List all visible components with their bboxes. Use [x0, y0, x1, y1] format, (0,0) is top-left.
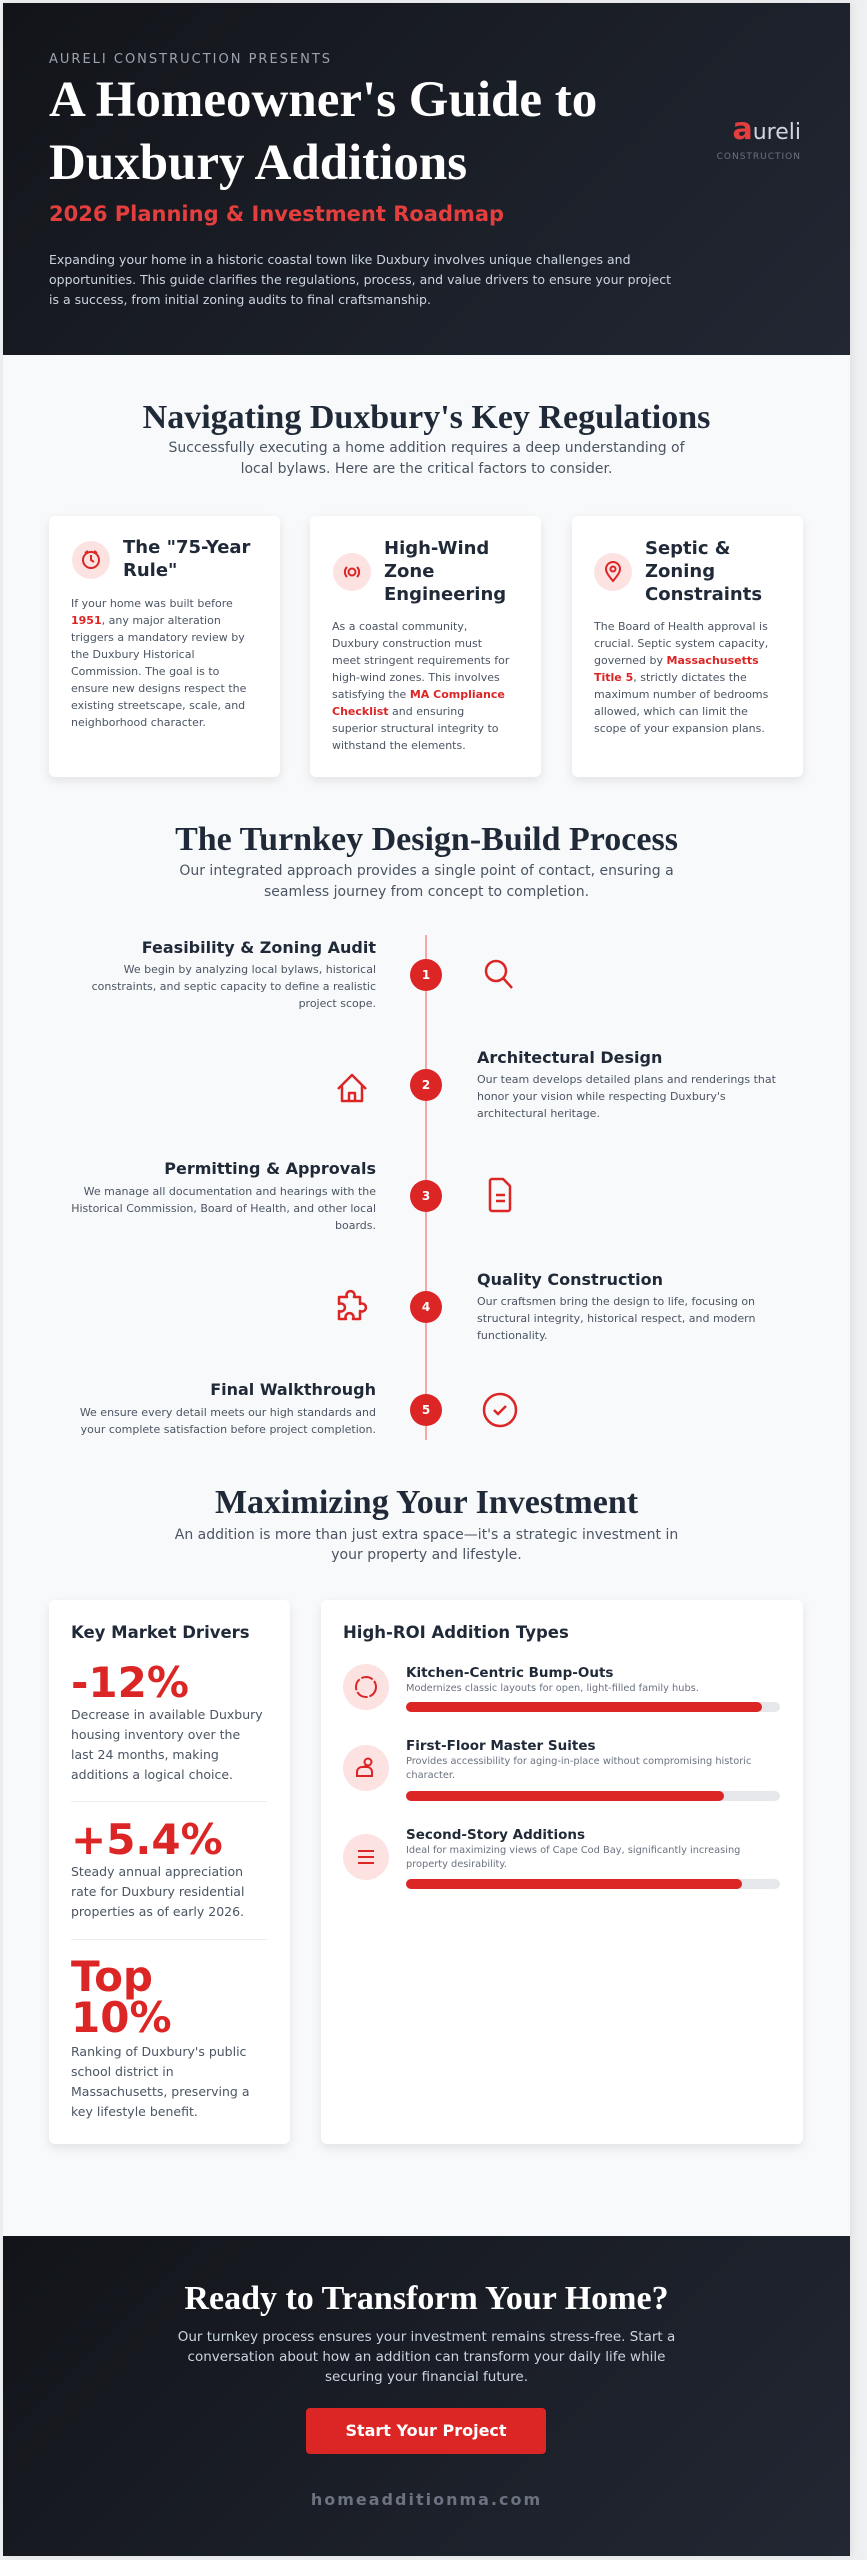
section heading: investment: Maximizing Your Investment: [215, 1484, 638, 1521]
panel title: Key Market Drivers: [71, 1623, 250, 1642]
section heading: process: The Turnkey Design-Build Process: [175, 821, 678, 858]
section heading: investment: your property and lifestyle.: [331, 1547, 522, 1563]
card body: Duxbury construction must: [332, 637, 482, 650]
intro paragraph: [49, 252, 671, 307]
stat: top 10%: Ranking of Duxbury's public: [71, 2044, 246, 2059]
card body: 1951, any major alteration: [71, 614, 221, 627]
step 2: 2: [422, 1078, 430, 1092]
cta text: conversation about how an addition can transform your daily life while: [188, 2349, 665, 2365]
stat: +5.4%: +5.4%: [71, 1815, 223, 1864]
logo: [717, 112, 801, 162]
roi item: master suites: [343, 1738, 780, 1801]
intro paragraph: opportunities. This guide clarifies the regulations, process, and value drivers to ensure your project: [49, 272, 671, 287]
section heading: regulations: [143, 399, 710, 477]
section heading: investment: [174, 1484, 678, 1563]
card body: [71, 597, 246, 729]
card body: ensure new designs respect the: [71, 682, 246, 695]
step 4: [338, 1270, 755, 1342]
card title: Zoning: [645, 561, 715, 582]
step 4: 4: [422, 1300, 430, 1314]
roi item: second-story: property desirability.: [406, 1859, 507, 1870]
step 2: architectural heritage.: [477, 1107, 600, 1120]
card body: withstand the elements.: [332, 739, 466, 752]
step 2: Our team develops detailed plans and renderings that: [477, 1073, 776, 1086]
step 5: [80, 1380, 518, 1436]
card body: governed by Massachusetts: [594, 654, 759, 667]
stat: -12%: housing inventory over the: [71, 1727, 240, 1742]
card body: maximum number of bedrooms: [594, 688, 768, 701]
stat: top 10%: Massachusetts, preserving a: [71, 2084, 250, 2099]
roi item: kitchen: [343, 1664, 780, 1712]
timeline: [71, 935, 776, 1440]
roi item: second-story: Second-Story Additions: [406, 1827, 585, 1843]
header: [3, 3, 850, 355]
card title: [384, 538, 506, 605]
card body: As a coastal community,: [332, 620, 467, 633]
intro paragraph: is a success, from initial zoning audits to final craftsmanship.: [49, 292, 431, 307]
card body: existing streetscape, scale, and: [71, 699, 245, 712]
section heading: process: Our integrated approach provides a single point of contact, ensuring a: [179, 863, 674, 879]
step 1: project scope.: [299, 997, 376, 1010]
stat: +5.4%: [71, 1815, 244, 1919]
step 1: constraints, and septic capacity to define a realistic: [92, 980, 376, 993]
cta text: Our turnkey process ensures your investment remains stress-free. Start a: [178, 2329, 675, 2345]
step 3: 3: [422, 1189, 430, 1203]
card body: scope of your expansion plans.: [594, 722, 765, 735]
step 4: Our craftsmen bring the design to life, focusing on: [477, 1295, 755, 1308]
card title: High-Wind: [384, 538, 489, 559]
step 4: structural integrity, historical respect, and modern: [477, 1312, 755, 1325]
stat: -12%: additions a logical choice.: [71, 1767, 233, 1782]
stat: top 10%: Top: [71, 1952, 153, 2001]
section heading: process: seamless journey from concept to completion.: [264, 884, 589, 900]
card body: The Board of Health approval is: [594, 620, 768, 633]
roi item: kitchen: Kitchen-Centric Bump-Outs: [406, 1665, 613, 1681]
card body: satisfying the MA Compliance: [332, 688, 505, 701]
cta button: [306, 2408, 546, 2454]
logo: aureli: [732, 112, 801, 147]
stat: -12%: [71, 1658, 263, 1782]
cta button: Start Your Project: [345, 2421, 507, 2440]
card title: [645, 538, 762, 605]
subtitle: 2026 Planning & Investment Roadmap: [49, 202, 504, 226]
roi item: master suites: character.: [406, 1770, 455, 1781]
step 2: Architectural Design: [477, 1048, 662, 1067]
stat: -12%: -12%: [71, 1658, 189, 1707]
card title: The "75-Year: [123, 537, 250, 558]
card body: superior structural integrity to: [332, 722, 498, 735]
section heading: regulations: Successfully executing a home addition requires a deep understanding of: [168, 440, 685, 456]
roi item: master suites: Provides accessibility for aging-in-place without compromising historic: [406, 1756, 751, 1767]
card body: Checklist and ensuring: [332, 705, 464, 718]
card title: Engineering: [384, 584, 506, 605]
stat: +5.4%: rate for Duxbury residential: [71, 1884, 244, 1899]
footer CTA: [3, 2236, 850, 2556]
stat: +5.4%: properties as of early 2026.: [71, 1904, 244, 1919]
panel: key market drivers: [49, 1600, 290, 2144]
section heading: regulations: local bylaws. Here are the critical factors to consider.: [241, 461, 612, 477]
card body: the Duxbury Historical: [71, 648, 195, 661]
intro paragraph: Expanding your home in a historic coastal town like Duxbury involves unique challenges and: [49, 252, 631, 267]
step 2: [337, 1048, 776, 1120]
icon: clock: [72, 541, 110, 579]
roi item: second-story: [343, 1827, 780, 1889]
card body: meet stringent requirements for: [332, 654, 509, 667]
card body: [594, 620, 768, 735]
step 1: Feasibility & Zoning Audit: [142, 938, 376, 957]
icon: wind signal: [333, 553, 371, 591]
panel: high-wind: [310, 516, 541, 777]
main title: Duxbury Additions: [49, 135, 467, 191]
section heading: investment: An addition is more than just extra space—it's a strategic investment in: [175, 1527, 678, 1543]
card body: Commission. The goal is to: [71, 665, 219, 678]
section heading: process: [175, 821, 678, 900]
card body: neighborhood character.: [71, 716, 206, 729]
card title: Zone: [384, 561, 434, 582]
stat: top 10%: [71, 1952, 250, 2119]
icon: location pin: [594, 553, 632, 591]
card body: [332, 620, 510, 752]
stat: top 10%: school district in: [71, 2064, 174, 2079]
cta heading: Ready to Transform Your Home?: [184, 2280, 669, 2317]
card body: triggers a mandatory review by: [71, 631, 245, 644]
header kicker: AURELI CONSTRUCTION PRESENTS: [49, 52, 332, 67]
step 1: [92, 938, 513, 1010]
stat: top 10%: 10%: [71, 1993, 172, 2042]
card title: Constraints: [645, 584, 762, 605]
step 3: Permitting & Approvals: [164, 1159, 376, 1178]
stat: -12%: Decrease in available Duxbury: [71, 1707, 263, 1722]
cta text: [178, 2329, 675, 2385]
card body: allowed, which can limit the: [594, 705, 748, 718]
section heading: regulations: Navigating Duxbury's Key Regulations: [143, 399, 710, 436]
step 3: boards.: [335, 1219, 376, 1232]
step 1: 1: [422, 968, 430, 982]
step 5: your complete satisfaction before project completion.: [81, 1423, 376, 1436]
stat: top 10%: key lifestyle benefit.: [71, 2104, 198, 2119]
website: homeadditionma.com: [311, 2490, 542, 2509]
logo: CONSTRUCTION: [717, 152, 801, 162]
roi item: master suites: First-Floor Master Suites: [406, 1738, 596, 1754]
card body: Title 5, strictly dictates the: [594, 671, 747, 684]
card title: Rule": [123, 560, 177, 581]
main title: [49, 72, 597, 191]
main title: A Homeowner's Guide to: [49, 72, 597, 128]
stat: +5.4%: Steady annual appreciation: [71, 1864, 243, 1879]
timeline line: [425, 935, 427, 1440]
step 1: We begin by analyzing local bylaws, historical: [124, 963, 376, 976]
card title: Septic &: [645, 538, 730, 559]
card body: If your home was built before: [71, 597, 233, 610]
card body: crucial. Septic system capacity,: [594, 637, 768, 650]
step 5: 5: [422, 1403, 430, 1417]
step 3: Historical Commission, Board of Health, and other local: [71, 1202, 376, 1215]
step 5: Final Walkthrough: [210, 1380, 376, 1399]
step 5: We ensure every detail meets our high standards and: [80, 1406, 376, 1419]
roi item: second-story: Ideal for maximizing views of Cape Cod Bay, significantly increasing: [406, 1845, 740, 1856]
panel: high-roi addition types: [321, 1600, 803, 2144]
roi item: kitchen: Modernizes classic layouts for open, light-filled family hubs.: [406, 1683, 699, 1694]
stat: -12%: last 24 months, making: [71, 1747, 219, 1762]
panel title: High-ROI Addition Types: [343, 1623, 569, 1642]
panel: 75-year rule: [49, 516, 280, 777]
card title: [123, 537, 250, 581]
step 3: We manage all documentation and hearings with the: [84, 1185, 376, 1198]
step 4: functionality.: [477, 1329, 548, 1342]
step 4: Quality Construction: [477, 1270, 663, 1289]
step 2: honor your vision while respecting Duxbury's: [477, 1090, 726, 1103]
cta text: securing your financial future.: [325, 2369, 528, 2385]
card body: high-wind zones. This involves: [332, 671, 500, 684]
step 3: [71, 1159, 512, 1232]
panel: septic: [572, 516, 803, 777]
